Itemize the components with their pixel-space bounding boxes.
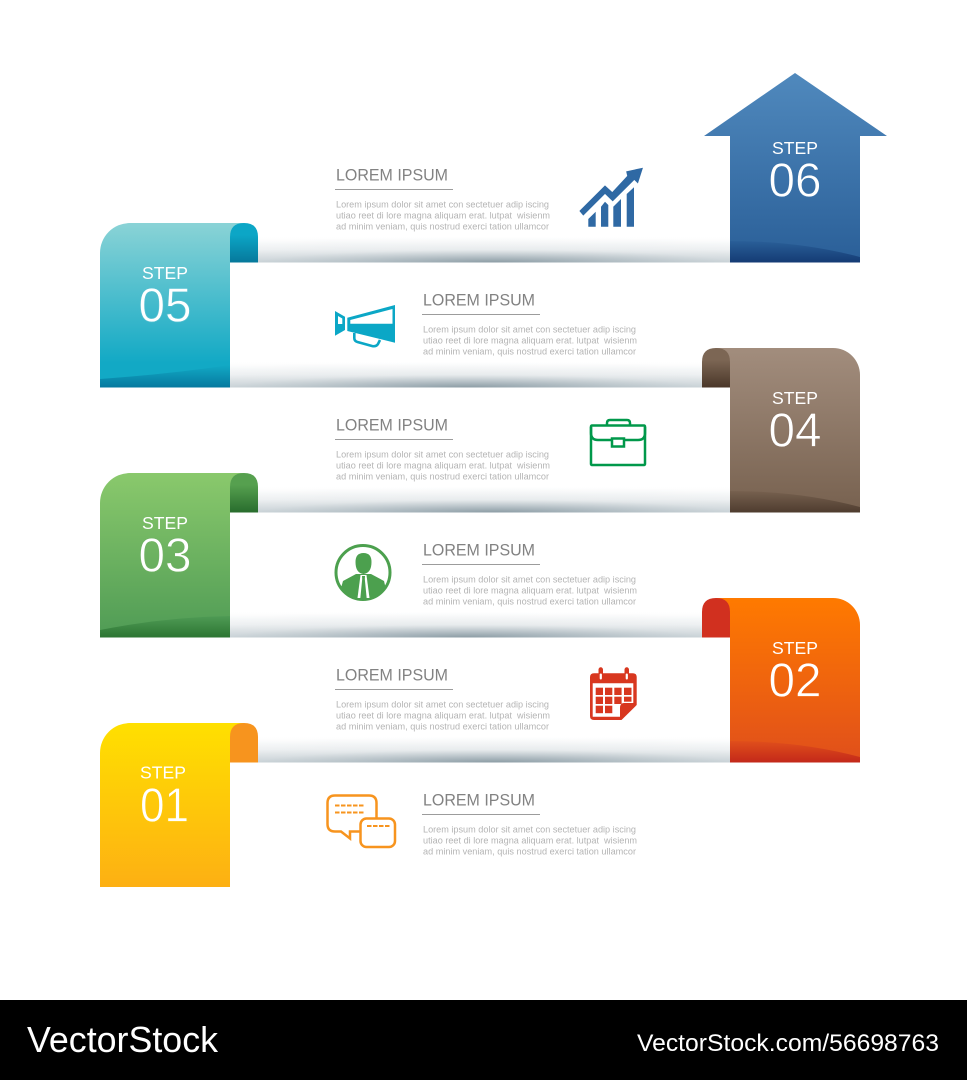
text block row 1 bbox=[422, 792, 637, 856]
shadow band row 4 bbox=[258, 487, 730, 512]
step 04 tab: STEP bbox=[772, 388, 818, 408]
text block row 6 bbox=[335, 166, 550, 232]
step 04 tab: 04 bbox=[768, 404, 822, 458]
text block row 2: Lorem ipsum dolor sit amet con sectetuer adip iscing bbox=[336, 700, 549, 710]
text block row 3: utiao reet di lore magna aliquam erat. lutpat wisienm bbox=[423, 586, 637, 596]
text block row 6: LOREM IPSUM bbox=[336, 166, 448, 184]
step 01 tab: 01 bbox=[140, 779, 189, 833]
text block row 3: LOREM IPSUM bbox=[423, 542, 535, 560]
text block row 5: ad minim veniam, quis nostrud exerci tation ullamcor bbox=[423, 346, 636, 356]
text block row 1: utiao reet di lore magna aliquam erat. lutpat wisienm bbox=[423, 836, 637, 846]
text block row 2: LOREM IPSUM bbox=[336, 666, 448, 684]
step 06 arrow bbox=[704, 73, 887, 262]
shadow band row 5 bbox=[230, 362, 702, 388]
step 01 tab bbox=[100, 723, 258, 887]
icon: megaphone bbox=[335, 305, 395, 346]
text block row 4: utiao reet di lore magna aliquam erat. lutpat wisienm bbox=[336, 460, 550, 470]
text block row 2: ad minim veniam, quis nostrud exerci tation ullamcor bbox=[336, 722, 549, 732]
shadow band row 3 bbox=[230, 612, 702, 638]
icon: rising bar chart bbox=[580, 168, 642, 227]
icon: calendar bbox=[590, 667, 637, 720]
text block row 3: ad minim veniam, quis nostrud exerci tation ullamcor bbox=[423, 596, 636, 606]
text block row 1: Lorem ipsum dolor sit amet con sectetuer adip iscing bbox=[423, 824, 636, 834]
step 02 tab: 02 bbox=[768, 654, 822, 708]
step 02 tab: STEP bbox=[772, 638, 818, 658]
step 01 tab: STEP bbox=[140, 762, 186, 782]
icon: businessman in circle bbox=[336, 546, 390, 602]
step 06 arrow: 06 bbox=[768, 154, 822, 208]
step 06 arrow: STEP bbox=[772, 138, 818, 158]
text block row 4: Lorem ipsum dolor sit amet con sectetuer adip iscing bbox=[336, 450, 549, 460]
footer bar: VectorStock bbox=[27, 1019, 219, 1060]
text block row 6: Lorem ipsum dolor sit amet con sectetuer adip iscing bbox=[336, 200, 549, 210]
shadow band row 6 bbox=[258, 237, 730, 262]
text block row 1: ad minim veniam, quis nostrud exerci tation ullamcor bbox=[423, 846, 636, 856]
text block row 6: ad minim veniam, quis nostrud exerci tation ullamcor bbox=[336, 222, 549, 232]
text block row 5: Lorem ipsum dolor sit amet con sectetuer adip iscing bbox=[423, 324, 636, 334]
icon: briefcase bbox=[591, 420, 645, 465]
text block row 2: utiao reet di lore magna aliquam erat. lutpat wisienm bbox=[336, 710, 550, 720]
text block row 4 bbox=[335, 416, 550, 482]
text block row 3: Lorem ipsum dolor sit amet con sectetuer adip iscing bbox=[423, 574, 636, 584]
shadow band row 2 bbox=[258, 737, 730, 762]
step 03 tab: STEP bbox=[142, 513, 188, 533]
text block row 1: LOREM IPSUM bbox=[423, 792, 535, 810]
text block row 6: utiao reet di lore magna aliquam erat. lutpat wisienm bbox=[336, 210, 550, 220]
step 03 tab bbox=[100, 473, 258, 638]
footer bar bbox=[0, 1000, 967, 1080]
step 02 tab bbox=[702, 598, 860, 762]
text block row 5: LOREM IPSUM bbox=[423, 292, 535, 310]
step 05 tab: 05 bbox=[138, 279, 192, 333]
step 04 tab bbox=[702, 348, 860, 512]
text block row 4: ad minim veniam, quis nostrud exerci tation ullamcor bbox=[336, 472, 549, 482]
text block row 5: utiao reet di lore magna aliquam erat. lutpat wisienm bbox=[423, 336, 637, 346]
step 03 tab: 03 bbox=[138, 529, 192, 583]
text block row 3 bbox=[422, 542, 637, 606]
step 05 tab: STEP bbox=[142, 263, 188, 283]
text block row 2 bbox=[335, 666, 550, 732]
icon: chat bubbles bbox=[328, 796, 395, 847]
step 05 tab bbox=[100, 223, 258, 388]
text block row 4: LOREM IPSUM bbox=[336, 416, 448, 434]
footer bar: VectorStock.com/56698763 bbox=[637, 1030, 939, 1057]
text block row 5 bbox=[422, 292, 637, 356]
